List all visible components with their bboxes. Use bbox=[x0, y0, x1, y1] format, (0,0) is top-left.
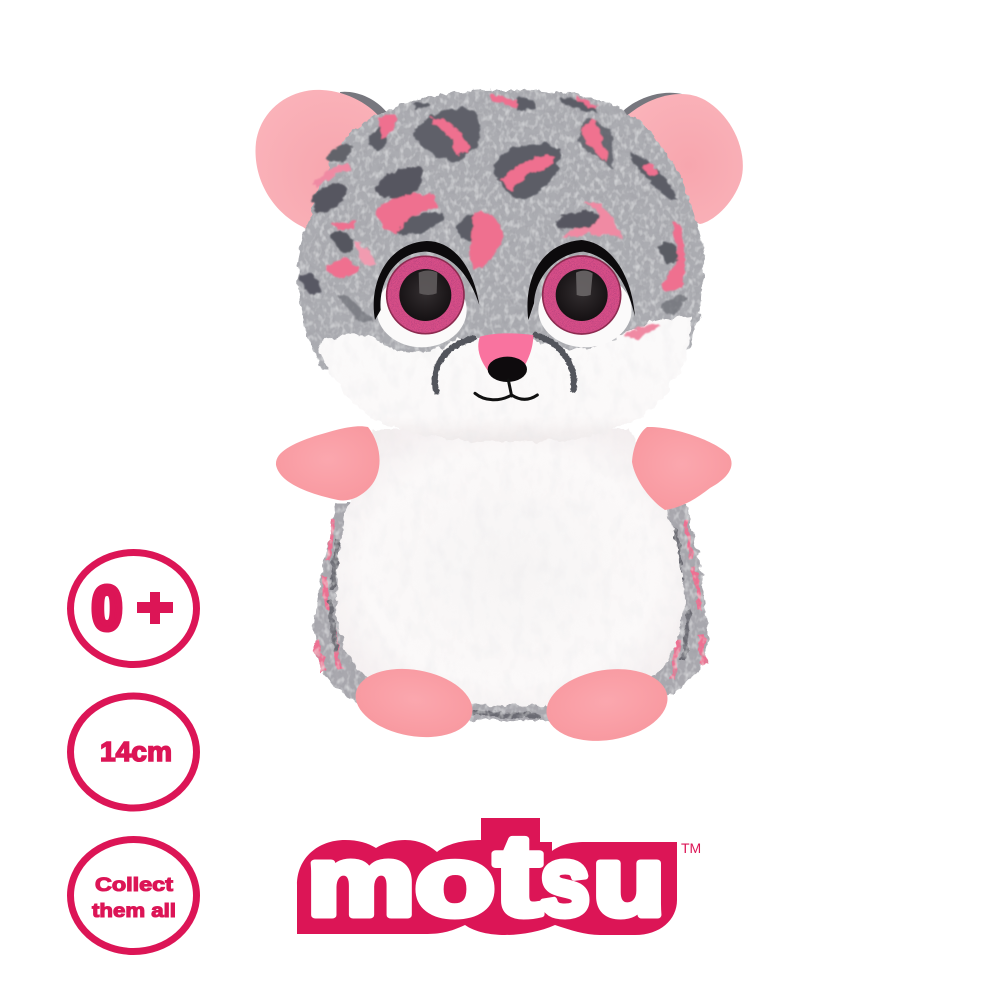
left eye bbox=[386, 256, 464, 334]
plush toy bbox=[255, 90, 743, 749]
badge: size 14cm bbox=[70, 696, 196, 808]
age number: 0 bbox=[92, 575, 122, 642]
left ear bbox=[255, 90, 400, 240]
mouth bbox=[475, 380, 537, 400]
trademark: TM bbox=[681, 840, 701, 856]
plus sign bbox=[137, 592, 173, 624]
head fur bbox=[298, 90, 704, 370]
face details bbox=[374, 240, 635, 400]
right eyelash bbox=[527, 240, 635, 320]
logo wordmark: s bbox=[540, 826, 590, 936]
logo backing bbox=[297, 818, 677, 935]
left eyelash bbox=[374, 241, 479, 320]
logo wordmark: u bbox=[593, 826, 665, 936]
leopard spots bbox=[300, 95, 688, 338]
pink nose bridge bbox=[478, 333, 533, 373]
logo wordmark: o bbox=[415, 826, 495, 936]
size label: 14cm bbox=[100, 736, 172, 767]
belly bbox=[336, 430, 683, 706]
face white bbox=[318, 316, 692, 442]
logo wordmark: t bbox=[494, 810, 542, 940]
them all label: them all bbox=[92, 901, 176, 922]
right muzzle stitch bbox=[535, 335, 574, 390]
right eye bbox=[542, 256, 621, 334]
right arm bbox=[632, 427, 732, 510]
right eye white bbox=[538, 273, 632, 347]
left arm bbox=[276, 426, 380, 500]
logo wordmark: m bbox=[307, 826, 415, 936]
left muzzle stitch bbox=[435, 338, 473, 392]
nose bbox=[488, 357, 527, 382]
right foot bbox=[541, 661, 673, 749]
logo: motsu bbox=[297, 810, 701, 940]
logo wordmark bbox=[307, 810, 665, 940]
badge: collect them all bbox=[70, 840, 196, 952]
body side fur bbox=[315, 503, 707, 721]
left eye white bbox=[377, 273, 467, 347]
collect label: Collect bbox=[95, 875, 174, 896]
right ear bbox=[622, 93, 743, 224]
left foot bbox=[350, 660, 478, 746]
badge: age 0+ bbox=[70, 552, 196, 664]
